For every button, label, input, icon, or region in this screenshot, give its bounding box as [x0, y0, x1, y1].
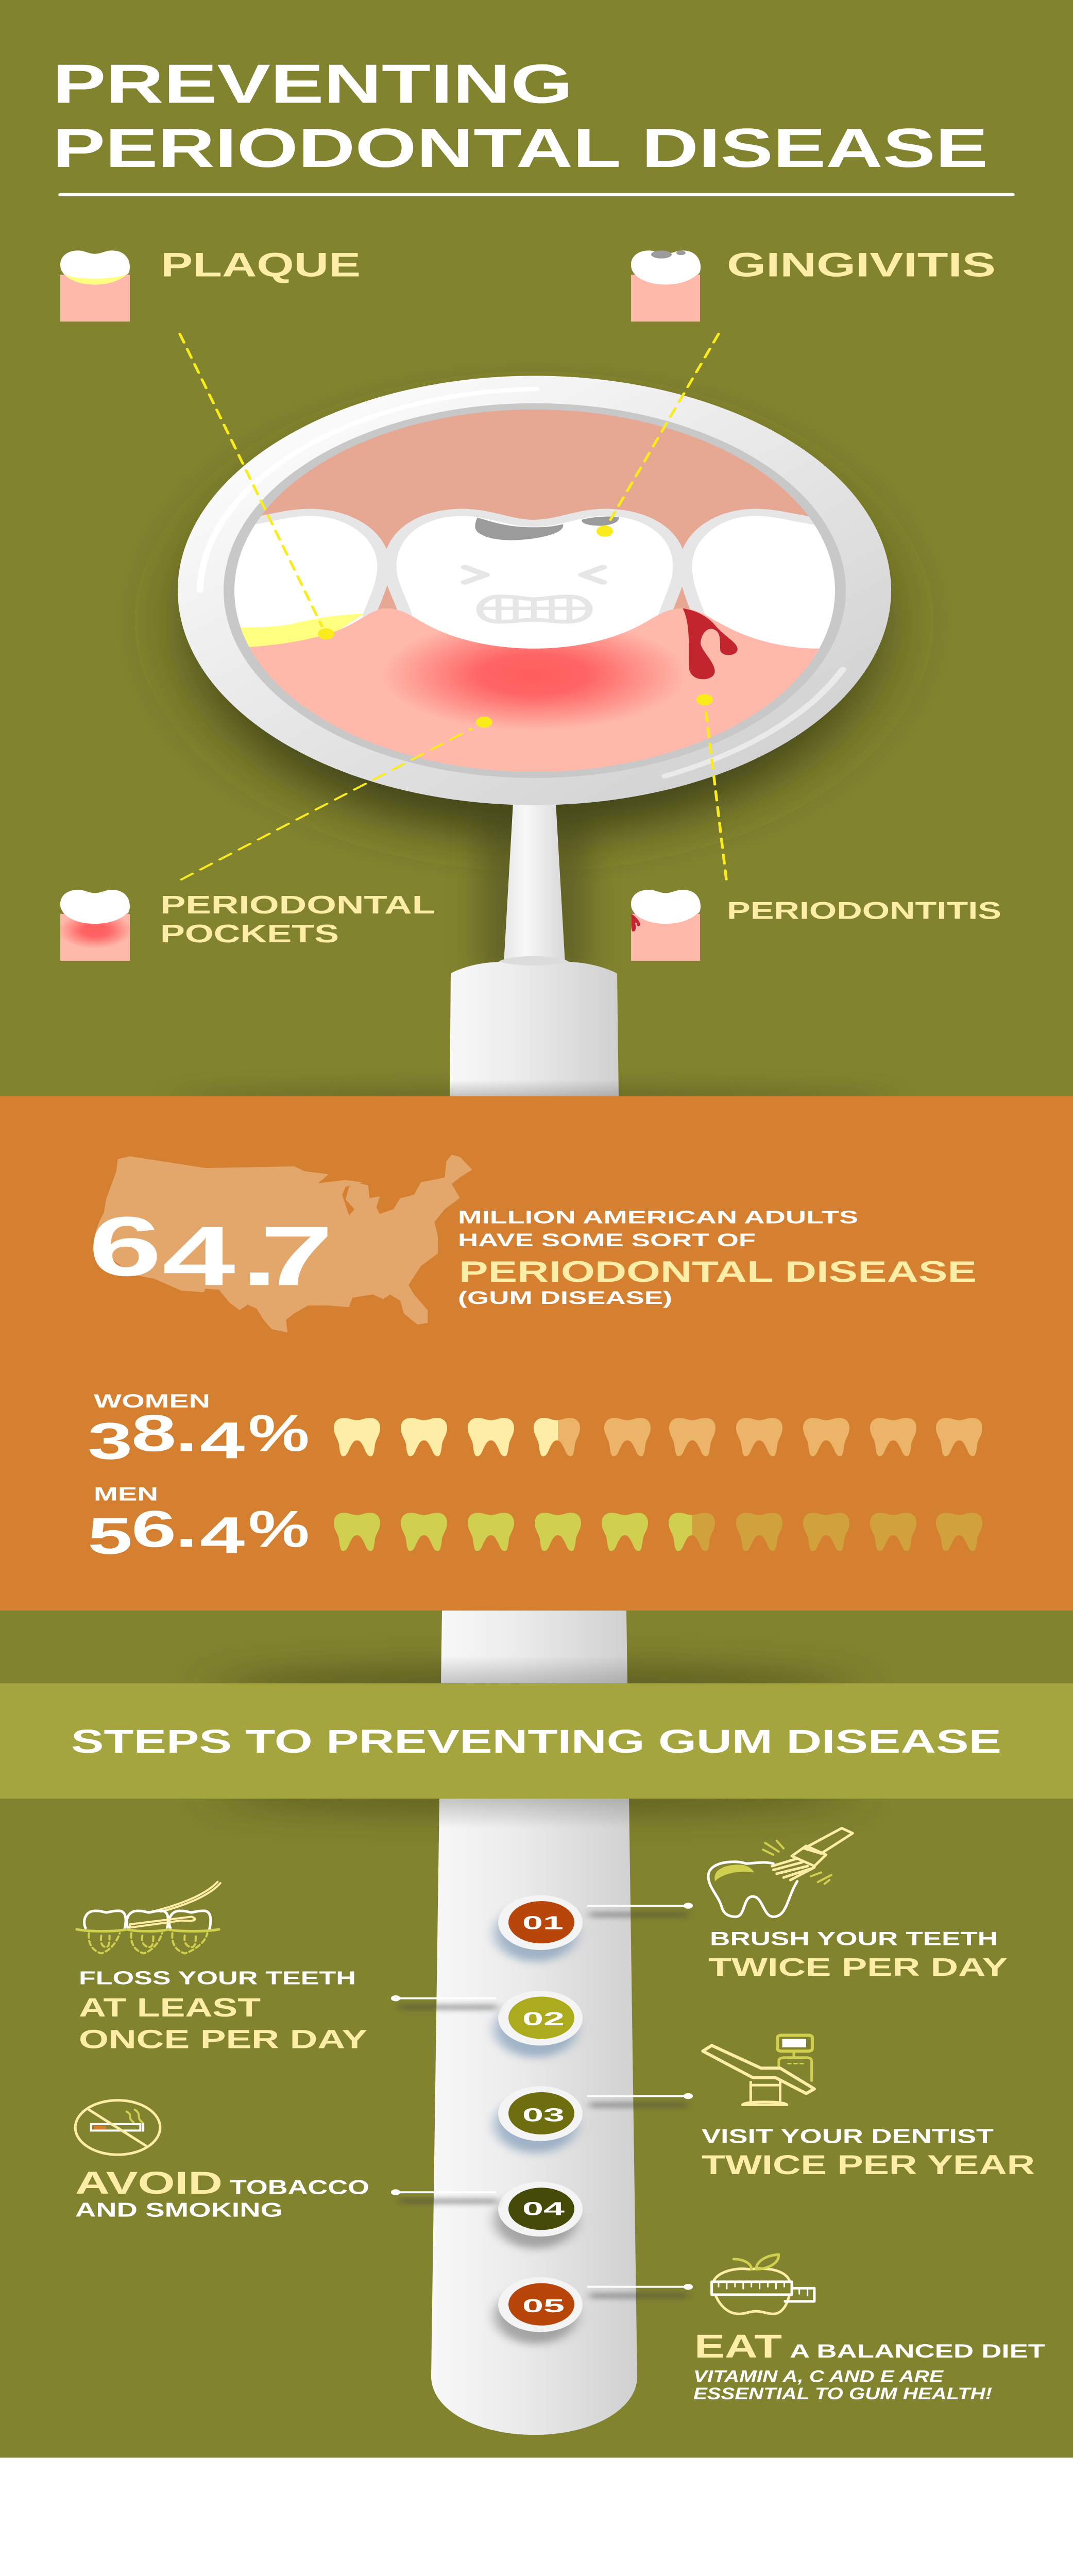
text: floss your teeth: ONCE PER DAY	[79, 2025, 367, 2054]
icon: no smoking	[75, 2100, 160, 2155]
callout leader: plaque	[180, 334, 334, 639]
men statistic: 56.4	[88, 1500, 245, 1565]
mirror stem	[504, 803, 565, 963]
step 03 badge: 03	[522, 2104, 565, 2125]
label: periodontal pockets: POCKETS	[160, 919, 339, 948]
men statistic: %	[248, 1500, 310, 1558]
label: plaque: PLAQUE	[161, 246, 361, 284]
text: floss your teeth	[79, 1968, 367, 2054]
mirror inner ring	[224, 403, 846, 778]
big number: 64.7	[89, 1199, 333, 1303]
mirror handle collar	[450, 956, 619, 1096]
central tooth	[390, 513, 679, 654]
label: gingivitis: GINGIVITIS	[727, 246, 996, 284]
mirror highlights	[200, 389, 843, 776]
text: avoid tobacco: TOBACCO	[230, 2176, 369, 2198]
step 02 badge: 02	[522, 2008, 565, 2029]
step 04 badge: 04	[522, 2198, 565, 2219]
statistic text: HAVE SOME SORT OF	[458, 1230, 756, 1250]
label: periodontitis: PERIODONTITIS	[727, 897, 1001, 924]
statistic text: PERIODONTAL DISEASE	[459, 1256, 977, 1289]
callout leader: periodontal pockets	[181, 717, 492, 879]
text: avoid tobacco: AND SMOKING	[75, 2199, 283, 2221]
mirror rim	[178, 376, 891, 805]
label: gingivitis	[631, 246, 996, 321]
panel: statistics	[0, 1096, 1073, 1611]
step 04 badge	[495, 2182, 583, 2248]
icon: apple with tape measure	[712, 2255, 814, 2314]
statistic text	[458, 1207, 977, 1308]
title: PREVENTING	[53, 53, 573, 114]
step 01 connector	[587, 1903, 693, 1917]
plaque build-up	[241, 614, 364, 651]
text: avoid tobacco	[75, 2165, 369, 2221]
mouth view inside mirror	[234, 409, 835, 772]
step 01 badge	[495, 1895, 583, 1961]
text: brush your teeth: BRUSH YOUR TEETH	[710, 1928, 998, 1950]
text: eat a balanced diet: EAT	[694, 2328, 782, 2365]
step 03 connector	[587, 2093, 693, 2108]
text: floss your teeth: AT LEAST	[79, 1993, 261, 2022]
step 01 badge: 01	[522, 1912, 564, 1933]
text: eat a balanced diet: ESSENTIAL TO GUM HEALTH!	[693, 2384, 992, 2403]
title: PERIODONTAL DISEASE	[53, 117, 988, 179]
step 05 connector	[587, 2284, 693, 2298]
tooth face	[465, 567, 603, 622]
women statistic: 38.4	[88, 1404, 245, 1470]
men statistic: MEN	[94, 1484, 158, 1505]
text: visit your dentist: VISIT YOUR DENTIST	[702, 2125, 994, 2147]
inflamed pocket	[381, 618, 687, 731]
text: floss your teeth: FLOSS YOUR TEETH	[79, 1968, 356, 1988]
text: brush your teeth: TWICE PER DAY	[708, 1953, 1008, 1981]
text: eat a balanced diet: VITAMIN A, C AND E ARE	[693, 2367, 944, 2385]
blood	[683, 608, 738, 679]
shadow under mirror	[174, 406, 895, 1106]
text: avoid tobacco: AVOID	[75, 2165, 223, 2200]
women tooth chart	[334, 1418, 982, 1456]
icon: toothbrush on tooth	[708, 1828, 853, 1917]
title	[53, 53, 988, 179]
women statistic: %	[248, 1404, 310, 1462]
icon: flossing teeth	[77, 1882, 220, 1954]
text: eat a balanced diet	[693, 2328, 1045, 2403]
callout leader: gingivitis	[597, 334, 719, 537]
men statistic	[88, 1484, 310, 1565]
icon: dental chair	[703, 2035, 814, 2105]
lower gum	[204, 608, 894, 802]
step 02 badge	[495, 1991, 583, 2057]
step 05 badge: 05	[522, 2295, 565, 2316]
map: United States	[92, 1155, 472, 1332]
step 05 badge	[495, 2277, 583, 2344]
handle segment above heading	[441, 1611, 627, 1683]
statistic text: (GUM DISEASE)	[458, 1287, 672, 1308]
label: periodontal pockets: PERIODONTAL	[160, 890, 435, 919]
men tooth chart	[334, 1513, 982, 1551]
text: visit your dentist	[702, 2125, 1035, 2180]
right tooth	[682, 509, 835, 657]
panel: steps heading band	[0, 1683, 1073, 1799]
dental mirror head	[178, 376, 894, 805]
text: brush your teeth	[708, 1928, 1008, 1981]
text: eat a balanced diet: A BALANCED DIET	[790, 2341, 1045, 2362]
callout leader: periodontitis	[696, 694, 726, 879]
label: periodontitis	[631, 890, 1001, 961]
panel: steps heading band: STEPS TO PREVENTING GUM DISEASE	[71, 1723, 1001, 1760]
label: plaque	[60, 246, 361, 321]
women statistic: WOMEN	[94, 1391, 210, 1412]
left tooth	[234, 509, 387, 657]
handle with rounded end	[431, 1799, 637, 2435]
label: periodontal pockets	[58, 890, 435, 961]
step 02 connector	[391, 1995, 497, 2010]
handle shadows around heading band	[215, 1664, 854, 1815]
step 04 connector	[391, 2189, 497, 2204]
text: visit your dentist: TWICE PER YEAR	[702, 2149, 1035, 2180]
cavities	[475, 518, 563, 540]
women statistic	[88, 1391, 310, 1470]
step 03 badge	[495, 2086, 583, 2153]
statistic text: MILLION AMERICAN ADULTS	[458, 1207, 858, 1227]
